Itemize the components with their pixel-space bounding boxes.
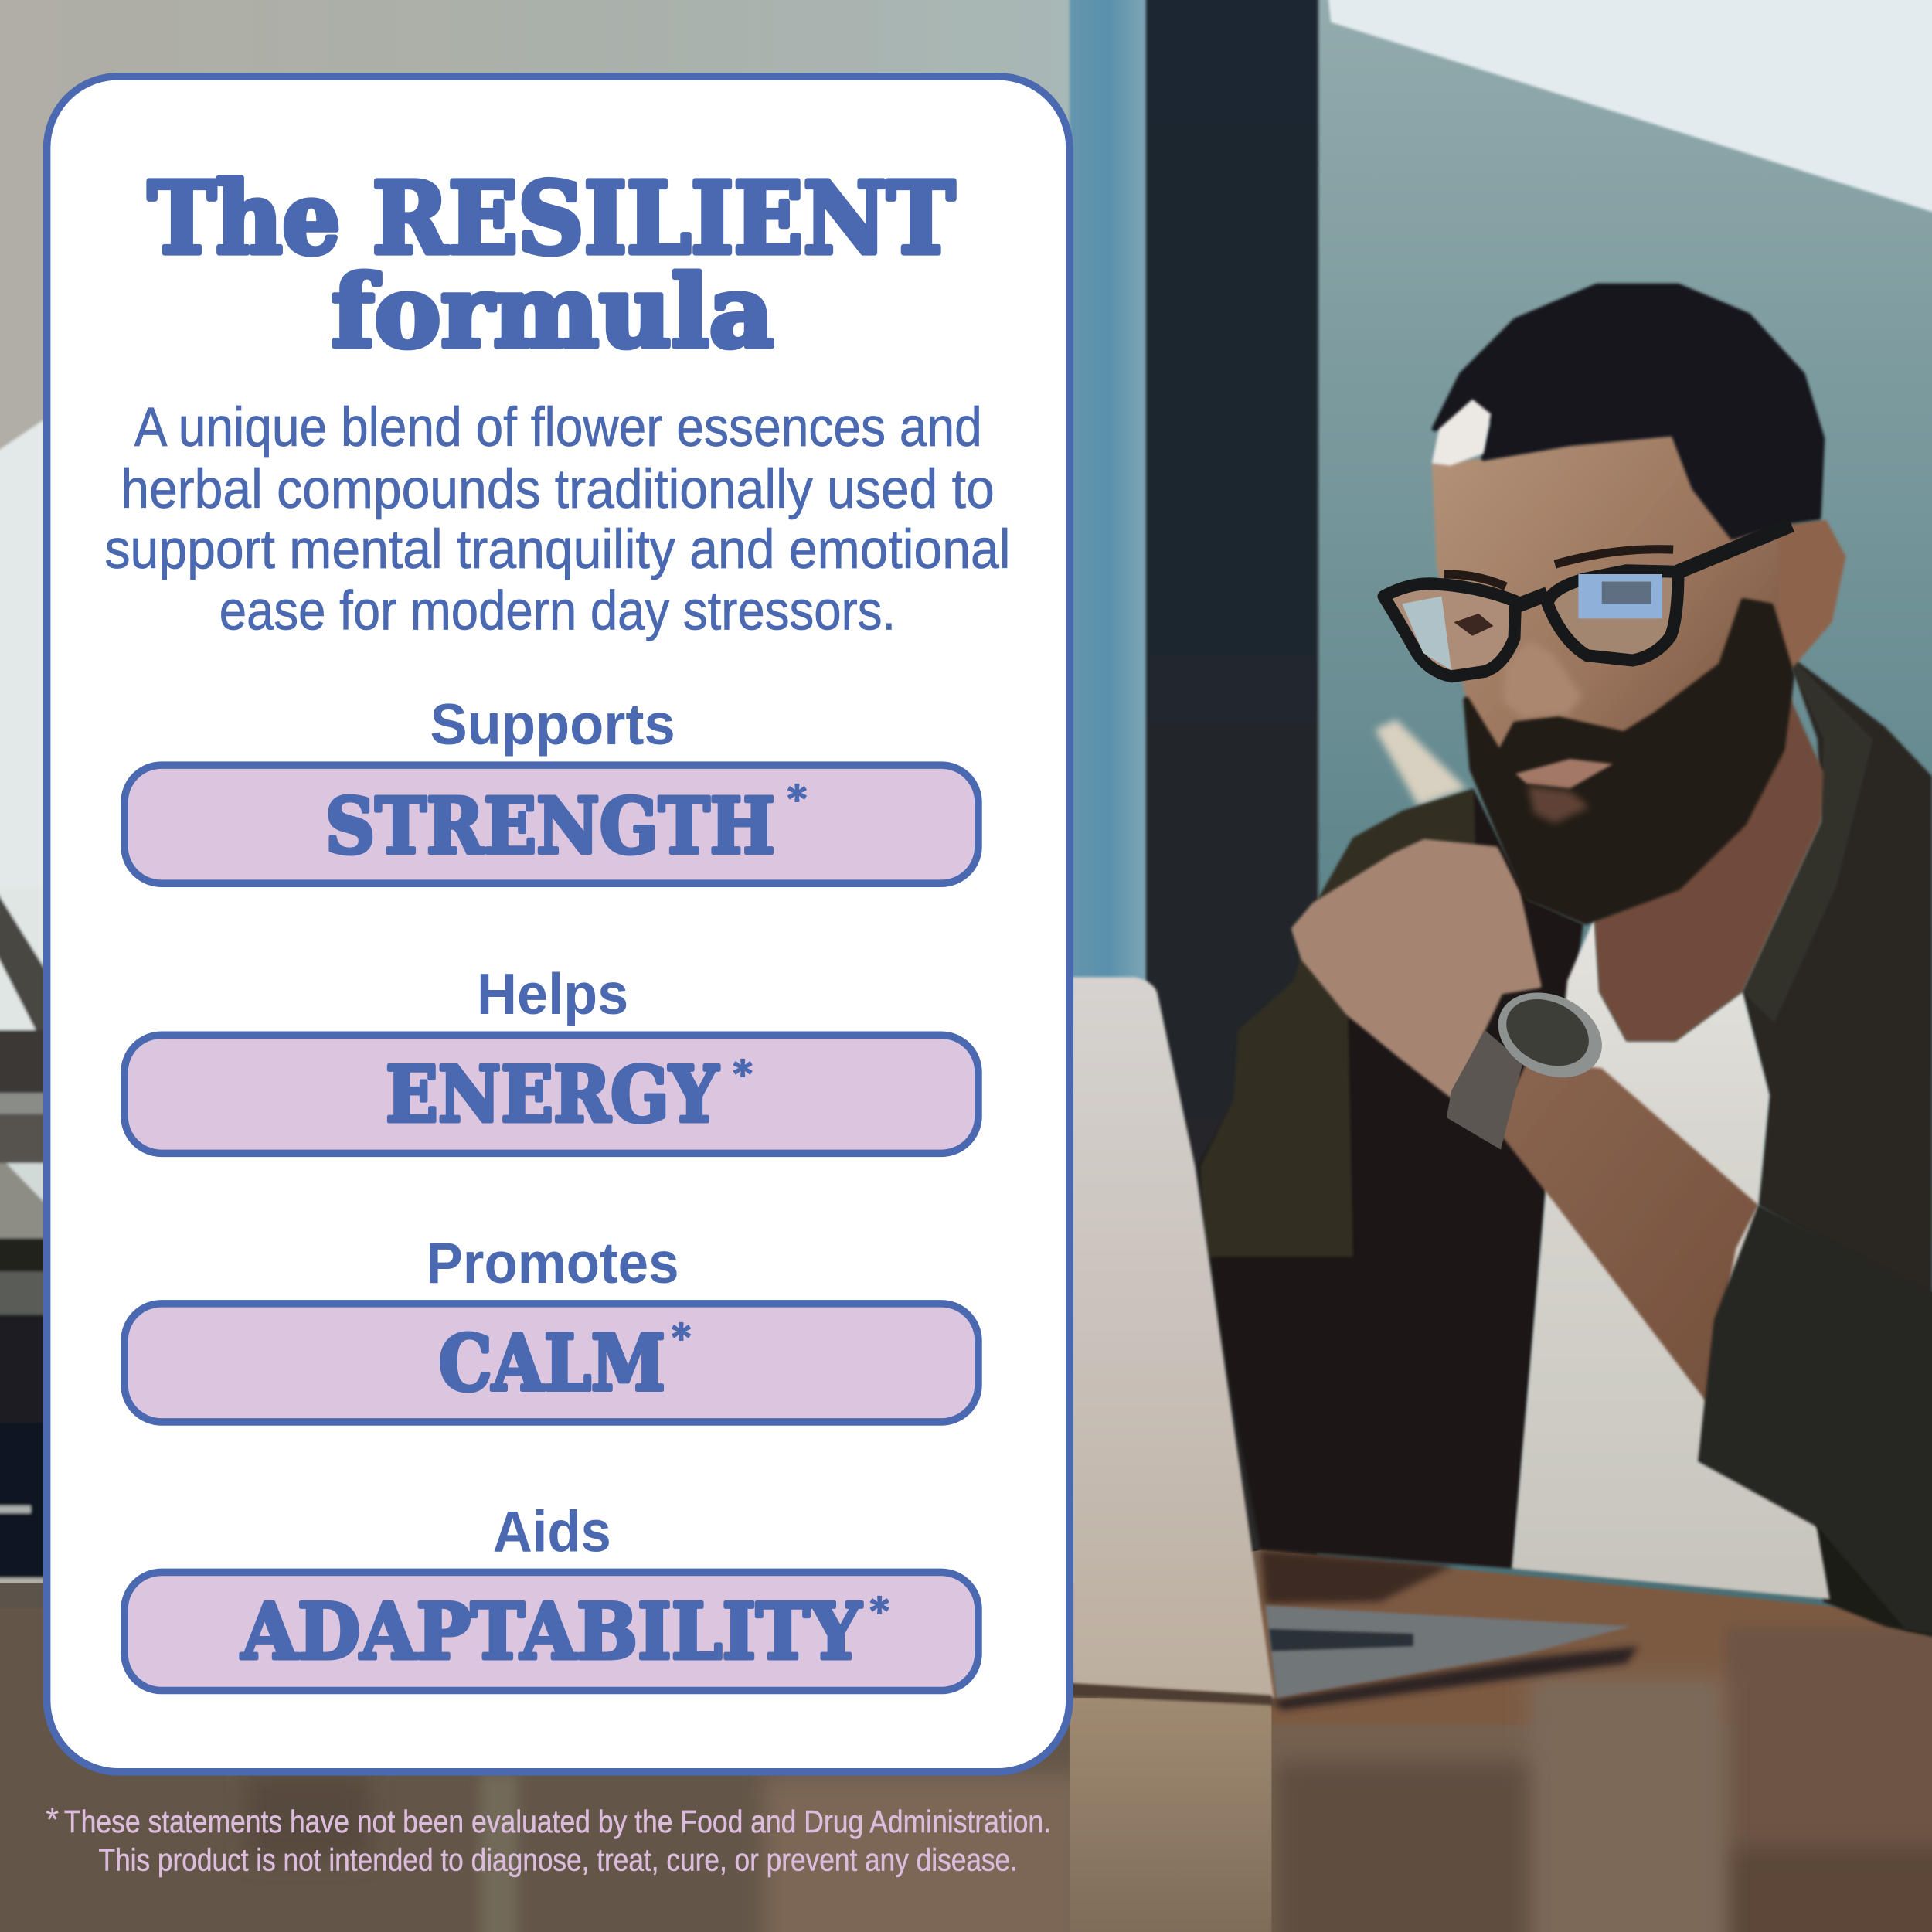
forearm (1496, 1060, 1758, 1402)
benefit: adaptability (124, 1498, 978, 1691)
benefit: strength: STRENGTH (325, 781, 775, 871)
title (148, 161, 955, 370)
white hair patch (1432, 400, 1491, 466)
intro text (105, 396, 1010, 642)
intro text: herbal compounds traditionally used to (121, 458, 995, 520)
hand (1294, 842, 1539, 1095)
t-shirt (1512, 821, 1830, 1600)
jacket (1198, 653, 1932, 1645)
benefit: energy: ENERGY (386, 1050, 719, 1140)
benefit: strength: Supports (430, 692, 675, 757)
benefit: energy: Helps (477, 961, 628, 1026)
benefit: calm: CALM (439, 1318, 665, 1408)
benefit: adaptability: ADAPTABILITY (241, 1587, 862, 1677)
benefit: calm: Promotes (427, 1230, 679, 1295)
footnote disclaimer: These statements have not been evaluated by the Food and Drug Administration. (64, 1804, 1051, 1839)
benefit: strength (124, 692, 978, 883)
intro text: A unique blend of flower essences and (134, 396, 982, 458)
man (1198, 286, 1932, 1645)
beard (1466, 601, 1791, 922)
laptop (1070, 977, 1639, 1710)
face (1432, 434, 1787, 872)
panel: formula card (47, 77, 1070, 1772)
benefit: strength: * (787, 778, 807, 821)
title: formula (332, 254, 774, 370)
left edge shelving (0, 420, 56, 1577)
hair (1434, 286, 1822, 537)
lips (1515, 759, 1613, 788)
footnote disclaimer (46, 1801, 1051, 1877)
intro text: support mental tranquility and emotional (105, 519, 1010, 580)
benefit: calm: * (672, 1316, 691, 1359)
title: The RESILIENT (148, 161, 955, 277)
benefit: energy: * (733, 1053, 753, 1096)
ear (1781, 522, 1843, 665)
benefit: adaptability: Aids (493, 1498, 611, 1563)
desk (0, 1550, 1932, 1932)
benefit: energy (124, 961, 978, 1153)
intro text: ease for modern day stressors. (219, 580, 896, 642)
glasses (1383, 525, 1791, 676)
sleeve (1698, 1205, 1932, 1639)
footnote disclaimer: This product is not intended to diagnose, treat, cure, or prevent any disease. (99, 1842, 1018, 1877)
chin patch (1528, 786, 1590, 823)
watch (1447, 976, 1616, 1150)
benefit: calm (124, 1230, 978, 1422)
benefit: adaptability: * (870, 1590, 889, 1633)
neck (1594, 690, 1824, 1041)
eyebrows (1444, 549, 1673, 587)
footnote disclaimer: * (46, 1801, 59, 1838)
nose (1503, 641, 1582, 717)
